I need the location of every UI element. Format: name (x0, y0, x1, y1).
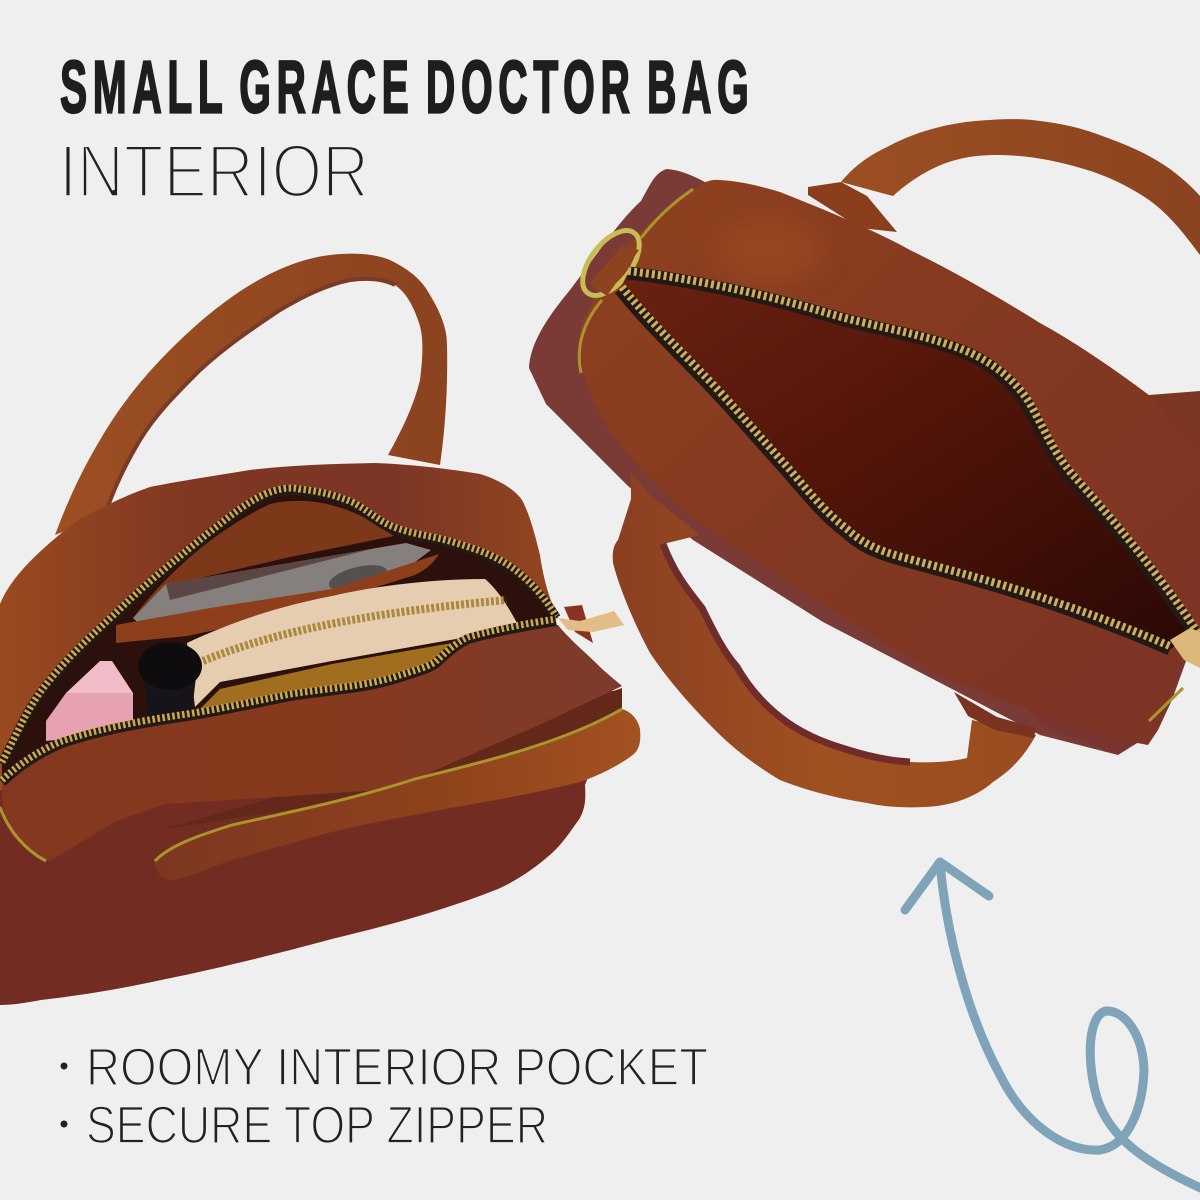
left bag edge line (0, 807, 46, 861)
phone dark top edge (166, 543, 406, 600)
left bag interior (2, 490, 556, 782)
right bag zipper top (628, 271, 1198, 635)
bullet 2: SECURE TOP ZIPPER (86, 1096, 548, 1155)
inner leather (133, 501, 394, 618)
right bag near handle (613, 472, 1036, 807)
pink box (46, 661, 133, 741)
left bag zipper bottom (2, 619, 556, 782)
bullet 1: ROOMY INTERIOR POCKET (86, 1038, 708, 1097)
right bag zipper pull (1170, 628, 1200, 668)
left bag back panel (0, 463, 558, 790)
phone camera (326, 560, 390, 596)
right bag far handle (808, 119, 1200, 255)
wallet tan pocket (195, 643, 452, 714)
subtitle: INTERIOR (59, 129, 369, 213)
right bag leather highlight (715, 218, 825, 282)
left bag front handle (155, 709, 640, 880)
black lipstick (138, 642, 202, 724)
right bag side strap and ring (572, 221, 1200, 454)
left bag front panel shadow (160, 688, 622, 830)
right bag back panel (529, 169, 1118, 755)
zipper pull (558, 605, 624, 643)
right bag edge stitching (579, 189, 1183, 721)
left bag zipper top (2, 488, 556, 764)
right bag lower corner (1000, 650, 1190, 755)
arrow (905, 862, 1200, 1190)
title: SMALL GRACE DOCTOR BAG (60, 46, 754, 129)
wallet (187, 579, 518, 707)
phone (133, 543, 431, 625)
left bag (0, 254, 640, 1005)
inner pocket flap (116, 554, 439, 643)
right bag interior opening (620, 273, 1196, 649)
right bag main body (579, 180, 1200, 745)
left bag lower body (0, 690, 622, 1005)
right bag (529, 119, 1200, 807)
left bag front panel (2, 625, 622, 861)
left bag handle (55, 254, 447, 535)
right bag zipper bottom (620, 287, 1172, 649)
wallet zipper (203, 600, 506, 661)
bullet list (60, 1038, 708, 1155)
